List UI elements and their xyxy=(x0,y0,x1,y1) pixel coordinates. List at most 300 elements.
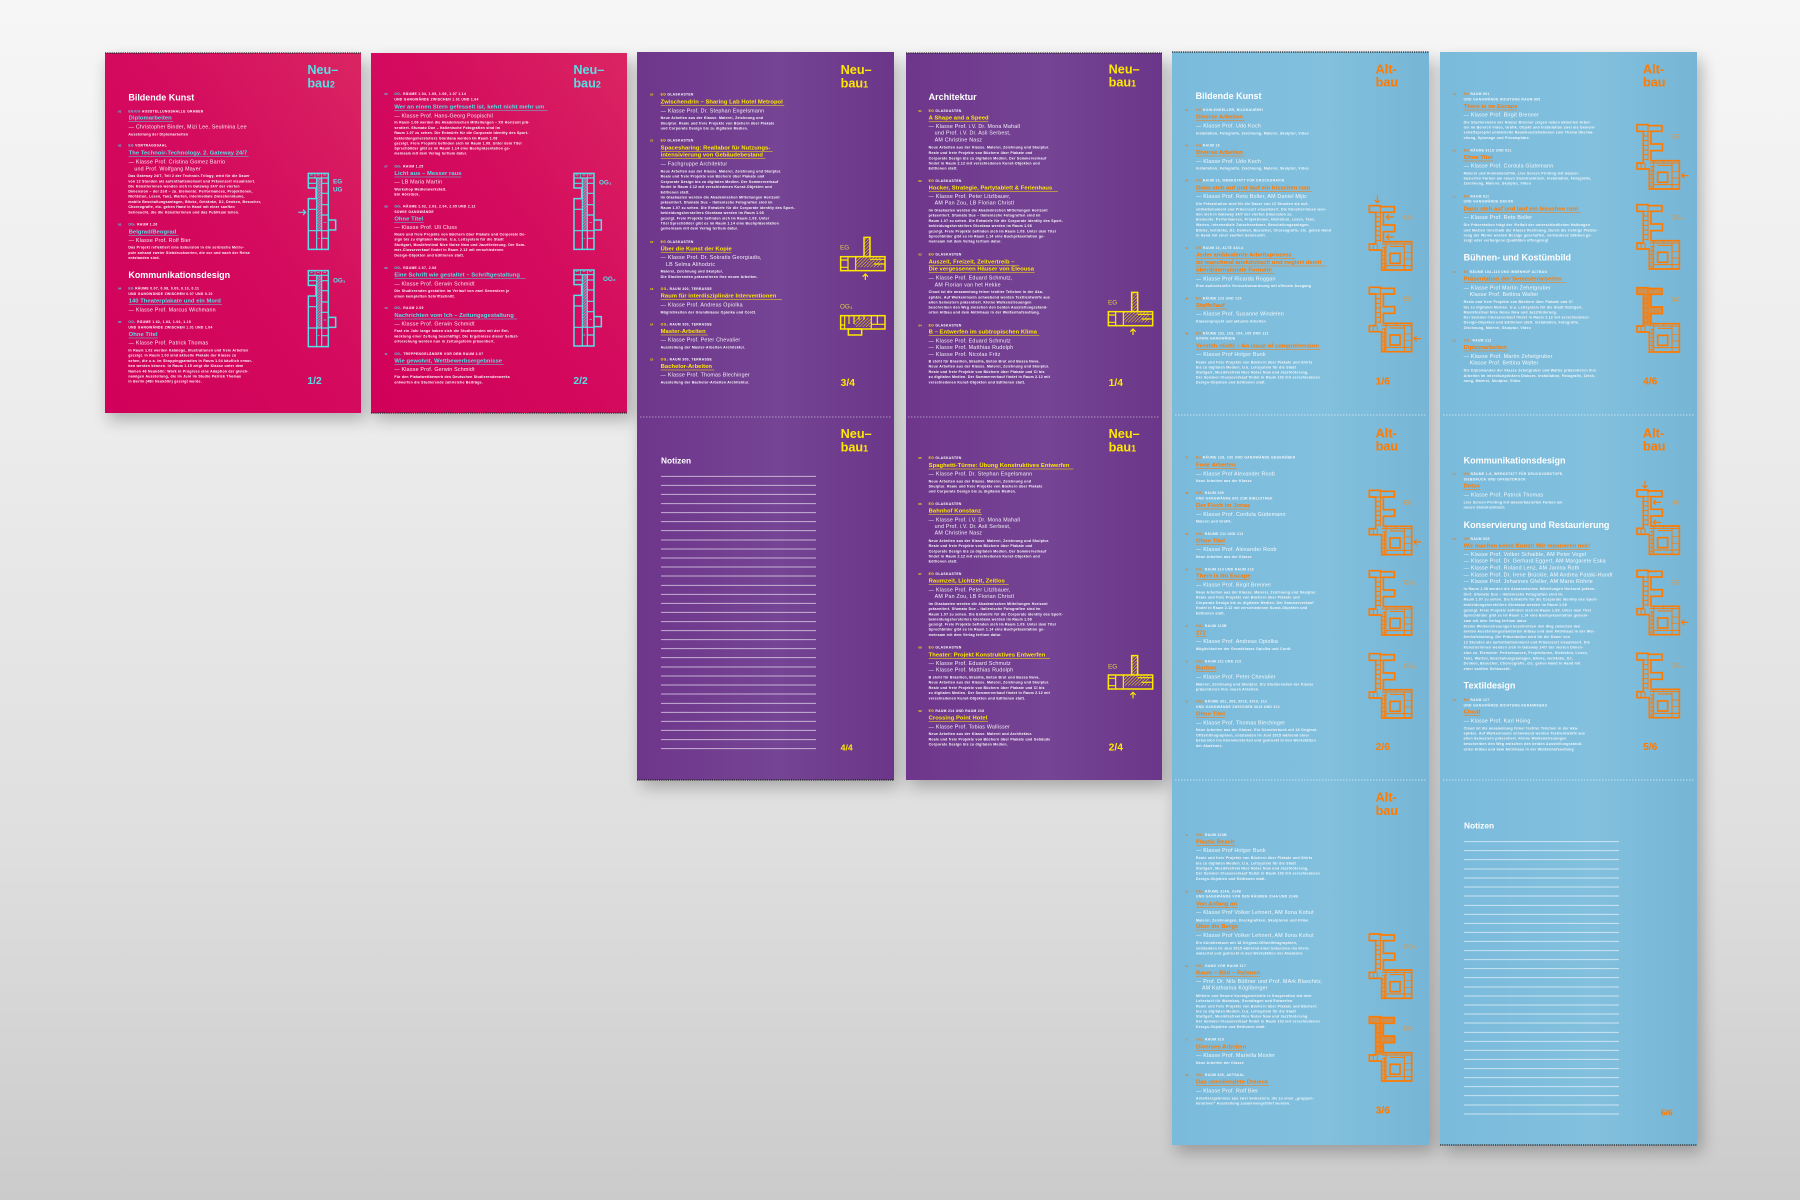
entry 24: neuen Siebdrucktisch xyxy=(1464,506,1505,510)
entry 02: Sehnsucht, die die Künstlerinnen und das Publikum teilen. xyxy=(128,210,239,214)
floor plan: EG xyxy=(1108,292,1153,335)
entry 25: UG RAUM 505 xyxy=(1464,537,1490,541)
floor plan: EG xyxy=(841,237,885,280)
entry 02: — Klasse Prof. Udo Koch xyxy=(1196,159,1261,165)
building name: Alt- xyxy=(1376,426,1397,440)
entry 22: Design-Objekten und Editionen statt. Installation, Fotografie, xyxy=(1464,321,1579,325)
entry 22: Klasse Prof. Bettina Walter xyxy=(1470,292,1539,298)
entry 25: In Raum 1.08 werden die Akademischen Mitteilungen Horizont präsen- xyxy=(1464,587,1597,591)
entry 02: präsentiert. Sfumato Due – Italienische Fotografien sind im xyxy=(929,214,1041,218)
entry 03 xyxy=(918,253,1050,315)
entry 24 xyxy=(1453,472,1564,510)
entry 08: zu digitalen Medien. Der Sommerverkauf findet in Raum 2.12 mit xyxy=(929,691,1051,695)
building name: Alt- xyxy=(1376,62,1397,76)
entry 20: Zeichnung, Malerei, Skulptur, Video xyxy=(1464,182,1531,186)
entry 11: Reale und freie Projekte von Büchern über Plakate und xyxy=(661,175,765,179)
building name: Neu– xyxy=(1109,62,1140,76)
entry 05: EG GLASKASTEN xyxy=(929,456,962,460)
entry 21: EG RAUM 611 xyxy=(1464,194,1489,198)
entry 24: Live Screen Printing mit wasserbasierten Farben am xyxy=(1464,500,1563,504)
entry 10: Skulptur. Reale und freie Projekte von Büchern über Plakate xyxy=(661,121,775,125)
floor label OG1: OG₁ xyxy=(1671,663,1683,670)
entry 25: — Klasse Prof. Dr. Gerhard Eggert, AM Margarete Eska xyxy=(1464,559,1606,565)
notes heading: Notizen xyxy=(1464,820,1494,830)
floor label EG: EG xyxy=(1403,296,1413,303)
entry 05: 05 xyxy=(918,456,922,460)
entry 19: chung, Spionage und Privatsphäre. xyxy=(1464,136,1530,140)
entry 09: Reale und freie Projekte von Büchern über Plakate und Gebäude xyxy=(929,737,1050,741)
entry 08: — Klasse Prof. Eduard Schmutz xyxy=(929,661,1011,667)
entry 20: basierten Farben am neuen Siebdrucktisch. Installation, Fotografie, xyxy=(1464,176,1591,180)
entry 11: bekleidungsherstellers Giordana werden im Raum 1.08 xyxy=(661,211,764,215)
entry 02: EG GLASKASTEN xyxy=(929,179,962,183)
entry 13: UND GANGWÄNDE ZWISCHEN 3019 UND 312 xyxy=(1196,705,1280,709)
entry 11: OG₂ RAUM 215B xyxy=(1196,624,1227,628)
floor label EG: EG xyxy=(1671,580,1680,587)
entry 11: findet in Raum 2.12 mit verschiedenen Kunst-Objekten und xyxy=(661,185,772,189)
entry 05 xyxy=(118,320,253,384)
entry 04: zu digitalen Medien. Der Sommerverkauf findet in Raum 2.12 mit xyxy=(929,375,1051,379)
entry 10: Neue Arbeiten aus der Klasse. Malerei, Zeichnung und Skulptur. xyxy=(1196,591,1317,595)
entry 10 xyxy=(1185,567,1317,615)
entry 11: — Klasse Prof. Andreas Opiolka xyxy=(1196,639,1278,645)
entry 08: Malerei und Grafik. xyxy=(1196,520,1232,524)
entry 07: — LB Maria Martin xyxy=(394,180,442,186)
entry 10: OG₂ RAUM 214 UND RAUM 216 xyxy=(1196,567,1254,571)
entry 03: Denn steh auf und lauf ein bisschen rum xyxy=(1196,185,1310,191)
building name: Neu– xyxy=(307,63,338,77)
entry 07: Freie Arbeiten xyxy=(1196,462,1236,468)
entry 06: bekleidungsherstellers Giordana werden im Raum 1.08 xyxy=(394,136,498,140)
entry 05: Neue Arbeiten aus der Klasse. Malerei, Zeichnung und xyxy=(929,479,1031,483)
entry 03: OG₁ RAUM 1.26 xyxy=(128,223,158,227)
entry 14: Plastic Beach xyxy=(1196,839,1235,845)
entry 02: The Technoir-Technology. 2. Gateway 24/7 xyxy=(129,151,247,157)
entry 13: Möglichkeiten der Grundklasse Opiolka und Cordt. xyxy=(661,310,756,314)
entry 15: OG₄ RAUM 300, TERRASSE xyxy=(661,358,713,362)
entry 11: Titel Sprechbilder gibt es im Raum 1.14 eine Buchpräsentation xyxy=(661,221,779,225)
building name: bau2 xyxy=(573,76,601,90)
entry 05: 05 xyxy=(1185,296,1189,300)
entry 09: Ohne Titel xyxy=(1196,538,1225,544)
entry 06 xyxy=(918,502,1050,564)
entry 08: OG₁ RAUM 209 xyxy=(1196,491,1224,495)
entry 16 xyxy=(1185,964,1323,1029)
entry 19: Die Studierenden der Klasse Brenner zeigen neben aktuellen Arbei- xyxy=(1464,120,1592,124)
entry 10: 10 xyxy=(650,93,654,97)
entry 07: Workshop Medienwerkstatt. xyxy=(394,187,447,191)
entry 11: EG GLASKASTEN xyxy=(661,139,694,143)
arrow xyxy=(298,210,306,215)
entry 01: — Klasse Prof. i.V. Dr. Mona Mahall xyxy=(929,124,1020,130)
entry 06: gezeigt. Freie Projekte befinden sich im Raum 1.09. Unter dem Titel xyxy=(394,141,522,145)
entry 09: Die Studierenden gestalten im Verlauf von zwei Semestern je xyxy=(394,289,509,293)
entry 19: schaftsprojekt entwickelte Raumkonstellationen zum Thema Überwa- xyxy=(1464,130,1594,135)
entry 14: Stuttgart, Musikfestival Nice Noise Now und Jazzförderung. xyxy=(1196,866,1309,870)
entry 14: 14 xyxy=(650,322,654,326)
entry 13: Raum für interdisziplinäre Interventionen xyxy=(661,294,777,300)
entry 02: 02 xyxy=(918,179,922,183)
entry 26: — Klasse Prof. Karl Höing xyxy=(1464,718,1531,724)
entry 09 xyxy=(1185,532,1277,559)
entry 02: Das Gateway 24/7, Teil 2 der Technoir-Trilogy, wird für die Dauer xyxy=(128,174,250,178)
entry 26: allen Semestern präsentiert. Kleine Wolkenstreuungen xyxy=(1464,737,1567,741)
floor plan: EG xyxy=(1637,570,1679,635)
entry 08 xyxy=(1185,491,1286,524)
entry 03: 03 xyxy=(1185,179,1189,183)
building name: Neu– xyxy=(841,427,872,441)
entry 03: 03 xyxy=(918,253,922,257)
entry 09: Neue Arbeiten aus der Klasse. Malerei und Architektur. xyxy=(929,732,1032,736)
entry 12: präsentieren ihre neuen Arbeiten. xyxy=(1196,688,1259,692)
entry 07: Raumzeit, Lichtzeit, Zeitlos xyxy=(929,579,1005,585)
entry 05: UND GANGWÄNDE ZWISCHEN 1.01 UND 1.04 xyxy=(128,325,213,329)
heading: Konservierung und Restaurierung: Konservierung und Restaurierung xyxy=(1464,520,1609,530)
entry 01 xyxy=(118,109,247,136)
entry 05: Skulptur. Reale und freie Projekte von Büchern über Plakate xyxy=(929,485,1043,489)
entry 15: — Klasse Prof Volker Lehnert, AM Ilona Kohut xyxy=(1196,910,1314,916)
entry 25: Tanz, Warten, Beschallungsanlagen, Blicke, Getränke, DJ, xyxy=(1464,656,1573,660)
entry 18: Arbeitsergebnisse aus zwei Semestern, die zu einer „gruppen- xyxy=(1196,1096,1315,1100)
entry 02: UG RAUM 18 xyxy=(1196,143,1220,147)
entry 18 xyxy=(1185,1073,1315,1106)
entry 05: — Klasse Prof. Dr. Stephan Engelsmann xyxy=(929,472,1032,478)
entry 04: Eine audiovisuelle Versuchsanordnung mit offenem Ausgang xyxy=(1196,284,1311,288)
entry 08: — Klasse Prof. Matthias Rudolph xyxy=(929,668,1013,674)
entry 22 xyxy=(1453,270,1589,330)
entry 15: — Klasse Prof Volker Lehnert, AM Ilona Kohut xyxy=(1196,933,1314,939)
entry 26: orten Altbau und dem Aktivhaus in der Weißenhofsiedlung xyxy=(1464,747,1574,751)
entry 01: 01 xyxy=(118,109,122,113)
entry 18: Das unvollendete Dreieck xyxy=(1196,1080,1269,1086)
entry 14: bis zu digitalen Medien. U.a. Leitsystem für die Stadt xyxy=(1196,861,1297,865)
entry 04: 04 xyxy=(1185,246,1189,250)
entry 01: Corporate Design bis zu digitalen Medien. Der Sommerverkauf xyxy=(929,156,1047,160)
entry 13: 13 xyxy=(1185,700,1189,704)
entry 13: Ohne Titel xyxy=(1196,712,1225,718)
entry 08: 08 xyxy=(384,205,388,209)
entry 06: UND GANGWÄNDE ZWISCHEN 1.01 UND 1.04 xyxy=(394,97,479,101)
entry 12: EG GLASKASTEN xyxy=(661,240,694,244)
floor label EG: EG xyxy=(1403,500,1413,507)
entry 06: EG RÄUME 102, 103, 104, 105 UND 112 xyxy=(1196,331,1269,335)
entry 09: 09 xyxy=(384,266,388,270)
entry 05: sehen, die u.a. im Shoppingparadies in Raum 1.04 käuflich erwor- xyxy=(128,359,253,363)
arrow xyxy=(1682,620,1688,625)
entry 24: 24 xyxy=(1453,472,1456,476)
entry 02 xyxy=(118,144,261,214)
entry 11: 272 xyxy=(1196,630,1207,636)
entry 07: EG RÄUME 128, 130 UND GANGWÄNDE GEGENÜBER xyxy=(1196,456,1296,460)
entry 01: Editionen statt. xyxy=(929,167,958,171)
entry 04: 140 Theaterplakate und ein Mord xyxy=(129,299,221,305)
entry 20 xyxy=(1453,148,1591,186)
floor plan: OG1 xyxy=(1369,571,1412,635)
entry 13: OG₂ RÄUME 301, 305, 3018, 3019, 312 xyxy=(1196,700,1267,704)
entry 02: — Klasse Prof. Cristina Gomez Barrio xyxy=(129,160,225,166)
floor plan: OG3 xyxy=(1369,934,1412,998)
page number: 3/4 xyxy=(841,378,855,389)
entry 23: — Klasse Prof. Martin Zehetgruber xyxy=(1464,354,1553,360)
floor plan: UG xyxy=(1637,490,1679,554)
entry 06: und Prof. i.V. Dr. Asli Serbest, xyxy=(935,524,1011,530)
floor plan: OG2 xyxy=(1369,654,1412,718)
entry 12: Malerei, Zeichnung und Skulptur. Die Studierenden der Klasse xyxy=(1196,682,1314,686)
entry 05: und Corporate Design bis zu digitalen Medien. xyxy=(929,490,1016,494)
entry 15: — Klasse Prof. Thomas Blechinger xyxy=(661,373,750,379)
entry 24: SIEBDRUCK UND OFFSETDRUCK xyxy=(1464,477,1526,481)
entry 08: sign bis zu digitalen Medien. U.a. Leitsystem für die Stadt xyxy=(394,238,504,242)
entry 15: OG₃ RÄUME 314A, 314B xyxy=(1196,889,1241,893)
entry 15: 15 xyxy=(1185,889,1189,893)
entry 04: B – Entwerfen im subtropischen Klima xyxy=(929,330,1038,336)
entry 15: UND GANGWÄNDE VOR DEN RÄUMEN 314A UND 314B xyxy=(1196,895,1298,899)
entry 06: Corporate Design bis zu digitalen Medien. Der Sommerverkauf xyxy=(929,549,1047,553)
heading: Architektur: Architektur xyxy=(929,92,977,102)
entry 02: AM Pan Zou, LB Florian Christl xyxy=(935,201,1014,207)
entry 01: 01 xyxy=(918,109,922,113)
entry 01: Diverse Arbeiten xyxy=(1196,115,1243,121)
entry 01: EG/UG AUSSTELLUNGSHALLE GRABEN xyxy=(128,109,204,113)
entry 06: findet in Raum 2.12 mit verschiedenen Kunst-Objekten und xyxy=(929,554,1040,558)
entry 26: Cloud xyxy=(1464,710,1481,716)
entry 11: Raum 1.07 zu sehen. Die Entwürfe für die Corporate Identity des Sport- xyxy=(661,206,796,210)
entry 11: präsentiert. Sfumato Due – Italienische Fotografien sind im xyxy=(661,201,773,205)
entry 04 xyxy=(918,323,1051,384)
entry 06: 06 xyxy=(918,502,922,506)
entry 11: — Fachgruppe Architektur xyxy=(661,161,727,167)
page number: 6/6 xyxy=(1661,1108,1673,1118)
entry 11: 11 xyxy=(384,352,388,356)
entry 01: Ausstellung der Diplomarbeiten xyxy=(128,132,188,136)
entry 03: Die vergessenen Häuser von Eleousa xyxy=(929,267,1035,273)
entry 03 xyxy=(118,223,250,260)
entry 04: Neue Arbeiten aus der Klasse. Malerei, Zeichnung und Skulptur. xyxy=(929,365,1050,369)
entry 13: — Klasse Prof. Thomas Blechinger xyxy=(1196,720,1285,726)
entry 02: Installation, Fotografie, Zeichnung, Malerei, Skulptur, Video xyxy=(1196,167,1309,171)
entry 15: walsertal und gedruckt in den Werkstätten der Akademie xyxy=(1195,952,1303,956)
entry 07: 07 xyxy=(1185,456,1189,460)
entry 05: Staffellauf xyxy=(1196,303,1225,309)
entry 02: 02 xyxy=(1185,143,1189,147)
entry 12: Malerei, Zeichnung und Skulptur. xyxy=(661,270,723,274)
panel: Neubau 2, sheet 1/2 xyxy=(105,53,361,413)
entry 22: Musikfestival Nice Noise Now und Jazzförderung. xyxy=(1464,310,1557,314)
entry 05: Spaghetti-Türme: Übung Konstruktives Entwerfen xyxy=(929,462,1070,469)
entry 01: 01 xyxy=(1185,108,1189,112)
entry 09: — Klasse Prof. Tobias Wallisser xyxy=(929,724,1010,730)
entry 02: Im Glaskasten werden die Akademischen Mitteilungen Horizont xyxy=(929,209,1048,213)
entry 02: meinsam mit dem Verlag tertium datur. xyxy=(929,240,1002,244)
heading: Kommunikationsdesign: Kommunikationsdesign xyxy=(1464,455,1566,465)
entry 06: Editionen statt. xyxy=(929,560,958,564)
entry 01: Diplomarbeiten xyxy=(129,116,172,122)
entry 26 xyxy=(1453,698,1585,751)
entry 06: bis zu digitalen Medien. U.a. Leitsystem für die Stadt xyxy=(1196,366,1297,370)
entry 06: 06 xyxy=(384,92,388,96)
page number: 4/6 xyxy=(1643,377,1658,388)
entry 17: 17 xyxy=(1185,1038,1189,1042)
building name: bau1 xyxy=(841,440,868,454)
entry 13: Neue Arbeiten aus der Klasse. Ein Künstlerbuch mit 18 Original- xyxy=(1196,728,1318,732)
entry 22: Zeichnung, Malerei, Skulptur, Video xyxy=(1464,326,1531,330)
entry 03: Das Projekt reflektiert eine Exkursion in die serbische Metro- xyxy=(128,246,245,250)
entry 06: sentiert. Sfumato Due – Italienische Fotografien sind im xyxy=(394,126,500,130)
entry 26: EG RAUM 127 xyxy=(1464,698,1490,702)
entry 04: Reale und freie Projekte von Büchern über Plakate und CI bis xyxy=(929,370,1045,374)
entry 11: Spacesharing: Reallabor für Nutzungs- xyxy=(661,145,770,151)
entry 01: Neue Arbeiten aus der Klasse. Malerei, Zeichnung und Skulptur. xyxy=(929,146,1050,150)
entry 03: pole anhand zweier Siebdruckserien, die vor und nach der Reise xyxy=(128,251,250,255)
entry 15: 15 xyxy=(650,358,654,362)
floor labels: UG xyxy=(333,187,343,194)
entry 02: gezeigt. Freie Projekte befinden sich im Raum 1.09. Unter dem Titel xyxy=(929,229,1056,233)
floor plan: EG xyxy=(1108,656,1153,698)
entry 09 xyxy=(384,266,526,298)
entry 22: — Klasse Prof Martin Zehetgruber xyxy=(1464,285,1551,291)
entry 02: 02 xyxy=(118,144,122,148)
entry 07: präsentiert. Sfumato Due – Italienische Fotografien sind im xyxy=(929,607,1041,611)
entry 19: 19 xyxy=(1453,92,1456,96)
floor label OG4: OG₄ xyxy=(840,303,853,310)
building name: bau1 xyxy=(1109,76,1136,90)
entry 06: Raum 1.07 zu sehen. Die Entwürfe für die Corporate Identity des Sport- xyxy=(394,131,529,135)
entry 06: Versteh mich! – An issue of comprehension xyxy=(1196,343,1319,349)
panel: Altbau, sheets 4/6, 5/6, 6/6 xyxy=(1440,52,1697,1145)
arrow xyxy=(1414,539,1421,545)
entry 25: — Klasse Prof. Johannes Gfeller, AM Mario Röhrle xyxy=(1464,579,1593,585)
floor plan: EG xyxy=(1369,490,1412,555)
entry 13: 13 xyxy=(650,287,654,291)
floor label DG: DG xyxy=(1403,1025,1413,1032)
building name: bau1 xyxy=(841,76,868,90)
entry 02: Diverse Arbeiten xyxy=(1196,150,1243,156)
entry 06: SOWIE GANGWÄNDE xyxy=(1196,336,1236,340)
entry 22: bis zu digitalen Medien. U.a. Leitsystem für die Stadt Stuttgart, xyxy=(1464,305,1583,309)
page number: 4/4 xyxy=(841,742,853,752)
entry 01: A Shape and a Speed xyxy=(929,115,989,121)
entry 23: 23 xyxy=(1453,339,1456,343)
entry 10: erforschung werden nun in Zeitungsform präsentiert. xyxy=(394,339,495,343)
entry 24: — Klasse Prof. Patrick Thomas xyxy=(1464,493,1544,499)
entry 16: OG₃ GANG VOR RAUM 317 xyxy=(1196,964,1246,968)
entry 25: — Klasse Prof. Roland Lenz, AM Janina Roth xyxy=(1464,566,1580,572)
entry 03: enthaltsmoment und Präsenzort visualisiert. Die Künstler/innen wen- xyxy=(1196,207,1327,211)
entry 04: — Klasse Prof. Nicolas Fritz xyxy=(929,352,1001,358)
entry 07: AM Pan Zou, LB Florian Christl xyxy=(935,594,1014,600)
entry 02: Hocker, Strategie, Partytablett & Ferienhaus xyxy=(929,186,1052,192)
entry 21: Die Präsentation trägt der Vielfalt der unterschiedlichen Haltungen xyxy=(1464,223,1590,227)
entry 01: Reale und freie Projekte von Büchern über Plakate und xyxy=(929,151,1033,155)
entry 05: OG₁ RÄUME 1.02, 1.03, 1.04, 1.15 xyxy=(128,320,191,324)
building name: Alt- xyxy=(1643,426,1664,440)
entry 10: — Klasse Prof. Gerwin Schmidt xyxy=(394,321,475,327)
entry 20: 20 xyxy=(1453,148,1456,152)
entry 03: EG GLASKASTEN xyxy=(929,253,962,257)
entry 05: Ohne Titel xyxy=(129,332,158,338)
floor plan: OG1 xyxy=(1637,653,1679,718)
entry 15: Ausstellung der Bachelor-Arbeiten Architektur. xyxy=(661,381,750,385)
entry 07: Raum 1.07 zu sehen. Die Entwürfe für die Corporate Identity des Sport- xyxy=(929,612,1064,616)
entry 08 xyxy=(384,205,526,257)
entry 10: EG GLASKASTEN xyxy=(661,93,694,97)
entry 01: und Prof. i.V. Dr. Asli Serbest, xyxy=(935,131,1011,137)
entry 20: — Klasse Prof. Cordula Güdemann xyxy=(1464,164,1553,170)
page number: 1/4 xyxy=(1109,378,1123,389)
entry 11: gemeinsam mit dem Verlag tertium datur. xyxy=(661,227,738,231)
entry 14: 14 xyxy=(1185,833,1189,837)
floor plan: EG xyxy=(1369,287,1412,352)
entry 03: UG RAUM 23, WERKSTATT FÜR DRUCKGRAFIK xyxy=(1196,179,1285,183)
entry 12: LB Selma Alihodzic xyxy=(666,262,715,268)
entry 11: Corporate Design bis zu digitalen Medien. Der Sommerverkauf xyxy=(661,180,779,184)
building name: bau xyxy=(1376,440,1398,454)
entry 08: 08 xyxy=(1185,491,1189,495)
building name: bau2 xyxy=(307,76,335,90)
floor plan: OG2 xyxy=(1637,205,1679,269)
entry 10: wicklung einer Zeitung beschäftigt. Die Ergebnisse dieser Selbst- xyxy=(393,334,519,338)
entry 10: Nachrichten vom Ich – Zeitungsgestaltung xyxy=(394,313,514,319)
entry 06: 06 xyxy=(1185,331,1189,335)
entry 10: Fast ein Jahr lange haben sich die Studierenden mit der Ent- xyxy=(394,329,510,333)
floor label OG2: OG₂ xyxy=(1671,215,1684,222)
entry 18: — Klasse Prof. Rolf Bier xyxy=(1196,1088,1258,1094)
entry 07: Ein Hörstück. xyxy=(394,193,420,197)
entry 08: SOWIE GANGWÄNDE xyxy=(394,210,434,214)
entry 09: Neue Arbeiten aus der Klasse xyxy=(1196,555,1252,559)
entry 08: Theater: Projekt Konstruktives Entwerfen xyxy=(929,653,1046,659)
entry 06: AM Christine Nasz xyxy=(935,531,982,537)
building name: Alt- xyxy=(1376,791,1397,805)
entry 17: Neue Arbeiten der Klasse xyxy=(1196,1061,1244,1065)
entry 19: — Klasse Prof. Birgit Brenner xyxy=(1464,113,1539,119)
entry 10: Neue Arbeiten aus der Klasse. Malerei, Zeichnung und xyxy=(661,116,763,120)
entry 13 xyxy=(1185,700,1318,748)
entry 25: Denken, Besucher, Choreografie, etc. gehen Hand in Hand mit xyxy=(1464,662,1581,666)
heading: Kommunikationsdesign: Kommunikationsdesign xyxy=(128,270,230,280)
entry 26: UND GANGWÄNDE RICHTUNG KERAMIKBAU xyxy=(1464,703,1548,707)
entry 19: ten im Bereich Video, Grafik, Objekt und Installation zwei als Gemein- xyxy=(1464,126,1596,130)
entry 13: Exkursion ins Kleinmeisterteil und gedruckt in den Werkstätten xyxy=(1196,739,1316,743)
entry 05: 05 xyxy=(118,320,122,324)
entry 11: entwerfen die Studierende zahlreiche Beiträge. xyxy=(394,380,483,384)
floor labels: EG xyxy=(333,178,342,185)
entry 08: EG GLASKASTEN xyxy=(929,645,962,649)
floor label OG3: OG₃ xyxy=(1403,943,1416,950)
entry 06: — Klasse Prof. Hans-Georg Pospischil xyxy=(394,113,493,119)
entry 04: UND GANGWÄNDE ZWISCHEN 0.07 UND 0.10 xyxy=(128,292,213,296)
entry 21: zeigt oder verborgene Qualitäten offengelegt xyxy=(1464,239,1549,243)
entry 16: Lehrstuhl für Wohnbau, Grundlagen und Entwerfen. xyxy=(1196,999,1294,1003)
entry 11: 11 xyxy=(650,139,653,143)
entry 14: — Klasse Prof Holger Bunk xyxy=(1196,848,1266,854)
entry 10: There is No Escape xyxy=(1196,574,1251,580)
entry 16: 16 xyxy=(1185,964,1189,968)
entry 02: — Klasse Prof. Peter Litzlbauer, xyxy=(929,194,1011,200)
entry 10: — Klasse Prof. Dr. Stephan Engelsmann xyxy=(661,108,764,114)
entry 25: — Klasse Prof. Dr. Irene Brückle, AM Andrea Pataki-Hundt xyxy=(1464,572,1613,578)
entry 05: — Klasse Prof. Susanne Windelen xyxy=(1196,312,1284,318)
entry 05: in Berlin (48h Neukölln) gezeigt wurde. xyxy=(128,380,202,384)
page number: 1/6 xyxy=(1376,377,1390,388)
entry 11 xyxy=(1185,624,1292,651)
entry 26: beschreiben den Weg zwischen den beiden Ausstellungsstand- xyxy=(1464,742,1583,746)
entry 22: Der Sommer-Clusseverkauf findet in Raum 2.12 mit verschiedenen xyxy=(1464,316,1589,320)
entry 05: ben werden können. In Raum 1.15 zeigt die Klasse unter dem xyxy=(128,364,244,368)
entry 04: ist manchmal anekdotisch und negiert damit xyxy=(1196,260,1321,266)
entry 17 xyxy=(1185,1038,1275,1065)
entry 25: sam mit dem Verlag tertium datur. xyxy=(1464,619,1528,623)
